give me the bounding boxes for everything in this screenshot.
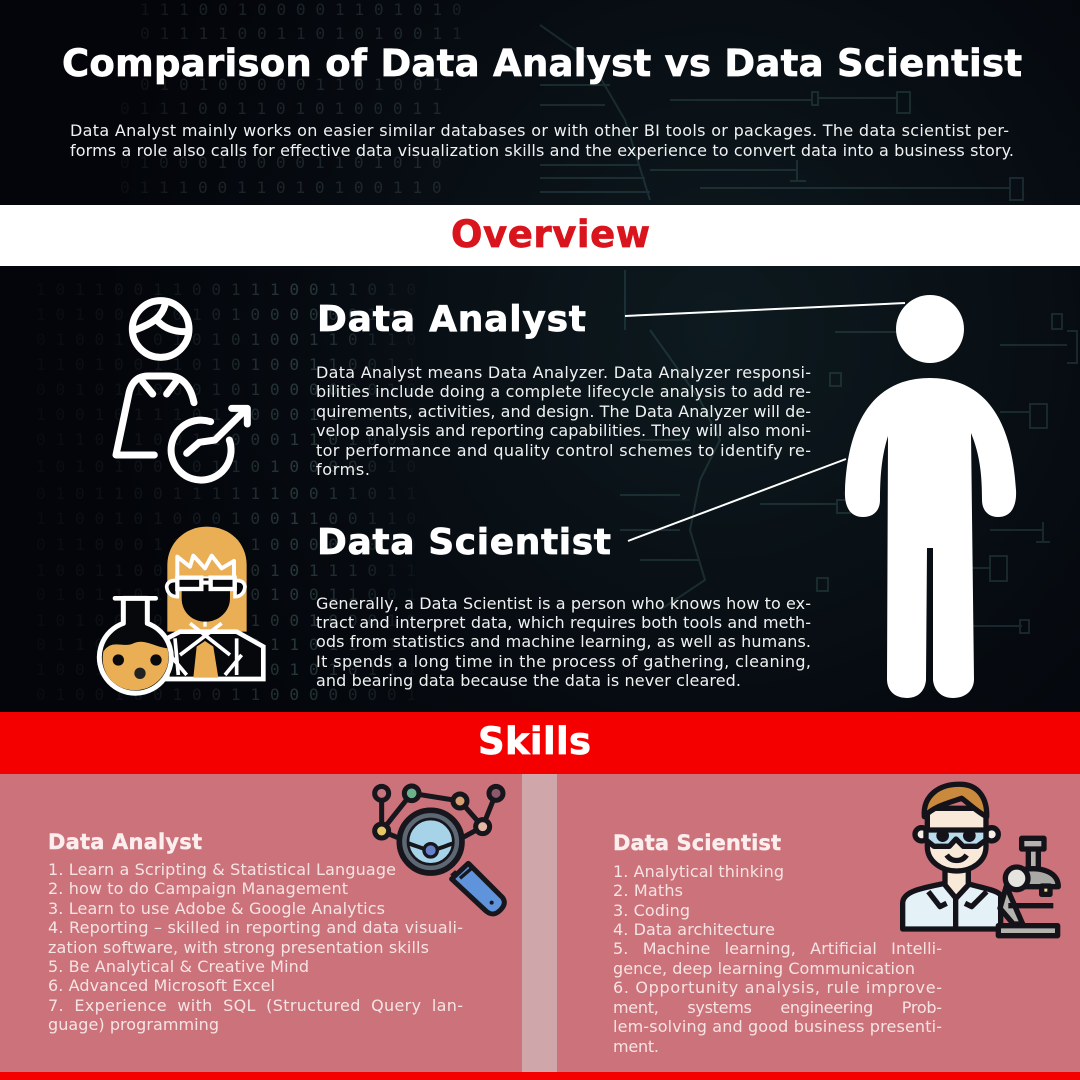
panel: data analyst skills: Data Analyst — [48, 830, 202, 854]
infographic canvas: 1 0 0 1 1 0 0 1 0 1 1 0 1 0 1 1 1 0 1 1 — [36, 561, 416, 580]
infographic canvas: 0 1 0 1 1 0 0 1 1 1 1 1 1 0 0 1 1 0 1 1 — [36, 484, 416, 503]
data scientist description: It spends a long time in the process of gathering, cleaning, — [316, 652, 811, 671]
panel: data scientist skills: 2. Maths — [613, 881, 683, 900]
infographic canvas: 0 1 1 0 0 1 0 0 1 1 0 0 0 1 1 0 1 0 0 1 — [36, 430, 416, 449]
data analyst description: velop analysis and reporting capabilities. They will also moni- — [316, 421, 811, 440]
infographic canvas: 1 0 1 0 0 1 0 0 1 0 1 1 0 0 1 0 0 0 1 0 — [36, 611, 416, 630]
infographic canvas: 0 1 1 0 1 0 0 1 0 1 0 0 1 1 0 1 1 0 1 0 — [36, 635, 416, 654]
panel: data analyst skills: 7. Experience with SQL (Structured Query lan- — [48, 996, 463, 1015]
panel: data scientist skills — [613, 831, 942, 1056]
data scientist description: tract and interpret data, which requires both tools and meth- — [316, 613, 811, 632]
overview band: Overview — [451, 213, 650, 256]
pointer line to body — [628, 459, 846, 541]
icon: data scientist — [99, 527, 263, 693]
human figure — [845, 295, 1016, 698]
skills band: Skills — [478, 720, 591, 763]
data scientist description — [316, 594, 811, 690]
data scientist description: ods from statistics and machine learning, as well as humans. — [316, 632, 811, 651]
infographic canvas: 1 0 1 1 0 0 1 1 0 0 1 1 1 0 0 1 1 0 1 0 — [36, 280, 416, 299]
data analyst description: forms. — [316, 460, 370, 479]
icon: data analyst — [116, 301, 247, 480]
panel: data scientist skills: gence, deep learning Communication — [613, 959, 915, 978]
intro text — [70, 121, 1014, 160]
infographic canvas: 0 1 0 0 1 0 0 1 0 0 1 1 0 0 0 0 0 0 0 1 — [36, 685, 416, 704]
data analyst description: tor performance and quality control schemes to identify re- — [316, 441, 811, 460]
infographic canvas: 0 1 0 1 0 0 0 0 0 1 1 0 1 0 0 1 — [140, 75, 442, 94]
data analyst description — [316, 363, 811, 479]
skills panels background — [0, 774, 1080, 1080]
data scientist description: and bearing data because the data is never cleared. — [316, 671, 741, 690]
panel: data scientist skills: 6. Opportunity analysis, rule improve- — [613, 978, 942, 997]
panel: data analyst skills: 4. Reporting – skilled in reporting and data visuali- — [48, 918, 463, 937]
data analyst description: quirements, activities, and design. The Data Analyzer will de- — [316, 402, 811, 421]
panel: data scientist skills: 4. Data architecture — [613, 920, 775, 939]
infographic canvas: 1 1 1 0 0 1 0 0 0 0 1 1 0 1 0 1 0 — [140, 0, 462, 19]
pointer line to head — [625, 303, 905, 316]
infographic canvas: 1 0 1 0 0 1 1 0 1 0 1 0 0 0 0 0 0 1 0 1 — [36, 305, 416, 324]
infographic canvas: 0 1 1 0 0 0 1 1 0 1 0 1 0 0 0 0 0 0 1 0 — [36, 535, 416, 554]
panel: data analyst skills: 2. how to do Campaign Management — [48, 879, 348, 898]
panel: data analyst skills: zation software, with strong presentation skills — [48, 938, 429, 957]
infographic canvas: 0 1 0 1 1 0 1 0 0 1 0 0 1 0 0 1 1 0 0 1 — [36, 585, 416, 604]
data analyst description: Data Analyst means Data Analyzer. Data Analyzer responsi- — [316, 363, 811, 382]
icon: scientist with microscope — [903, 784, 1058, 936]
title: Comparison of Data Analyst vs Data Scientist — [62, 42, 1022, 85]
infographic canvas: 1 0 1 0 1 0 0 1 0 1 1 0 1 0 0 0 0 0 1 0 — [36, 457, 416, 476]
panel: data analyst skills: 1. Learn a Scripting & Statistical Language — [48, 860, 396, 879]
panel: data scientist skills: ment. — [613, 1037, 659, 1056]
infographic canvas: 0 1 1 1 1 0 0 1 1 0 1 0 1 0 0 1 1 — [140, 24, 462, 43]
infographic canvas: 0 0 1 0 1 1 0 0 0 1 0 1 0 0 0 0 0 0 1 0 — [36, 380, 416, 399]
panel: data scientist skills: Data Scientist — [613, 831, 781, 855]
data scientist description: Generally, a Data Scientist is a person who knows how to ex- — [316, 594, 811, 613]
infographic canvas: 1 1 0 0 1 0 1 0 0 0 1 0 0 1 1 0 0 1 1 0 — [36, 509, 416, 528]
intro text: Data Analyst mainly works on easier similar databases or with other BI tools or packages. The data scientist per- — [70, 121, 1009, 140]
infographic canvas: 0 1 0 0 0 1 0 0 0 0 1 1 0 1 0 1 0 — [120, 153, 442, 172]
panel: data scientist skills: 3. Coding — [613, 901, 690, 920]
panel: data scientist skills: 5. Machine learning, Artificial Intelli- — [613, 939, 942, 958]
panel: data scientist skills: ment, systems engineering Prob- — [613, 998, 942, 1017]
icon: magnifier with network — [375, 786, 504, 914]
panel: data scientist skills: lem-solving and good business presenti- — [613, 1017, 942, 1036]
infographic canvas: 0 1 1 1 0 0 1 1 0 1 0 1 0 0 1 1 0 — [120, 178, 442, 197]
panel: data analyst skills: 6. Advanced Microsoft Excel — [48, 976, 275, 995]
infographic canvas: 1 0 0 1 0 1 1 1 0 1 1 0 0 0 1 1 0 1 0 1 — [36, 405, 416, 424]
heading: data scientist: Data Scientist — [317, 522, 611, 563]
panel: data scientist skills: 1. Analytical thinking — [613, 862, 784, 881]
infographic canvas: 0 1 0 0 1 1 0 1 0 1 0 1 0 0 1 1 0 1 1 0 — [36, 330, 416, 349]
infographic canvas: 1 0 0 1 0 1 1 0 1 0 1 0 0 1 0 1 0 1 1 1 — [36, 660, 416, 679]
panel: data analyst skills — [48, 830, 463, 1034]
panel: data analyst skills: 3. Learn to use Adobe & Google Analytics — [48, 899, 385, 918]
panel: data analyst skills: 5. Be Analytical & Creative Mind — [48, 957, 309, 976]
infographic canvas: 0 1 1 1 0 0 1 1 0 1 0 1 0 0 0 1 1 — [120, 99, 442, 118]
panel: data analyst skills: guage) programming — [48, 1015, 219, 1034]
heading: data analyst: Data Analyst — [317, 299, 586, 340]
intro text: forms a role also calls for effective data visualization skills and the experience to convert data into a business story. — [70, 141, 1014, 160]
skills band — [0, 712, 1080, 774]
data analyst description: bilities include doing a complete lifecycle analysis to add re- — [316, 382, 811, 401]
infographic canvas: 1 1 0 1 0 0 1 1 0 1 0 1 0 0 1 1 0 0 1 1 — [36, 355, 416, 374]
overview band — [0, 205, 1080, 266]
